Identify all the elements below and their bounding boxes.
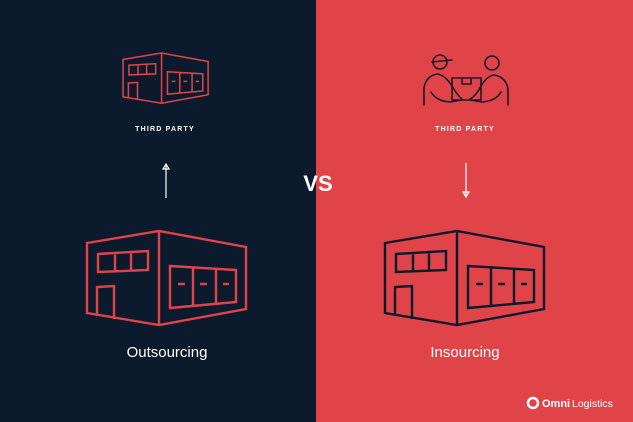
logo: omni logistics xyxy=(528,398,613,410)
logo: omni logistics: Omni xyxy=(542,398,570,410)
label: outsourcing: Outsourcing xyxy=(127,344,207,361)
icon: small building third party xyxy=(123,53,208,103)
arrow: up xyxy=(163,164,169,198)
label: insourcing: Insourcing xyxy=(430,344,500,361)
big building outsourcing xyxy=(87,231,246,325)
label: third party right: THIRD PARTY xyxy=(435,126,495,133)
big building insourcing xyxy=(385,231,544,325)
label: third party left: THIRD PARTY xyxy=(135,126,195,133)
logo: omni logistics: Logistics xyxy=(572,398,613,410)
VS heading: VS xyxy=(303,171,333,196)
right panel background xyxy=(316,0,633,422)
icon: people handing box xyxy=(424,55,508,105)
arrow: down xyxy=(463,163,469,197)
left panel background xyxy=(0,0,316,422)
